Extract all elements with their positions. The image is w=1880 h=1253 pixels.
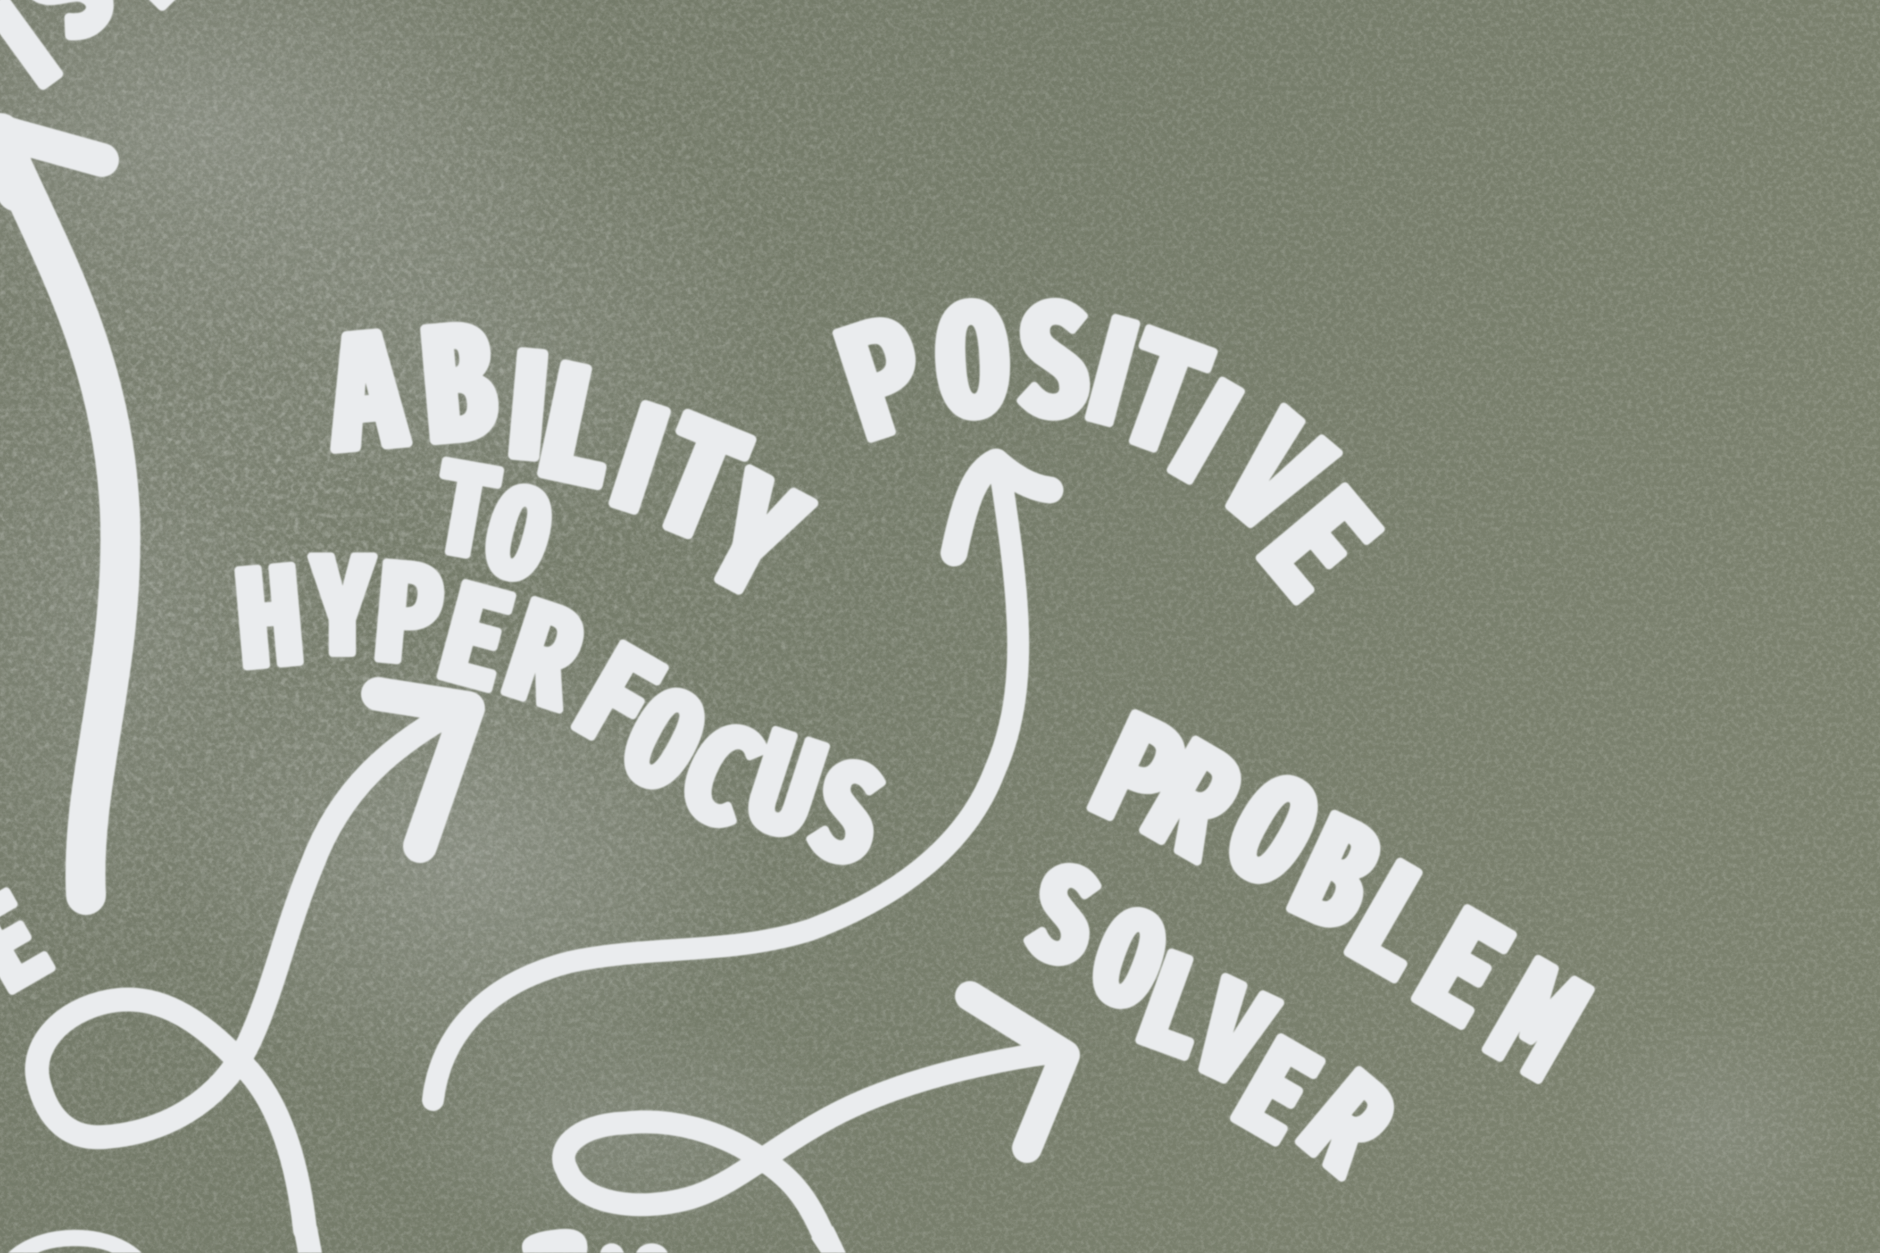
- label: to: TO: [422, 411, 572, 617]
- label: solver: SOLVER: [1012, 811, 1436, 1206]
- paint fragments bottom: [522, 1229, 668, 1253]
- arrow: to problem solver: [564, 996, 1065, 1253]
- label: problem: PROBLEM: [1068, 659, 1623, 1118]
- curve fragment bottom left: [8, 1230, 142, 1253]
- label: hyperfocus: HYPERFOCUS: [228, 503, 905, 904]
- label: positive: POSITIVE: [811, 240, 1434, 636]
- arrow: long arrow to top left word: [0, 130, 120, 895]
- arrow: to positive: [433, 462, 1050, 1100]
- label: ability: ABILITY: [319, 262, 843, 641]
- arrow: to ability to hyperfocus: [37, 694, 468, 1253]
